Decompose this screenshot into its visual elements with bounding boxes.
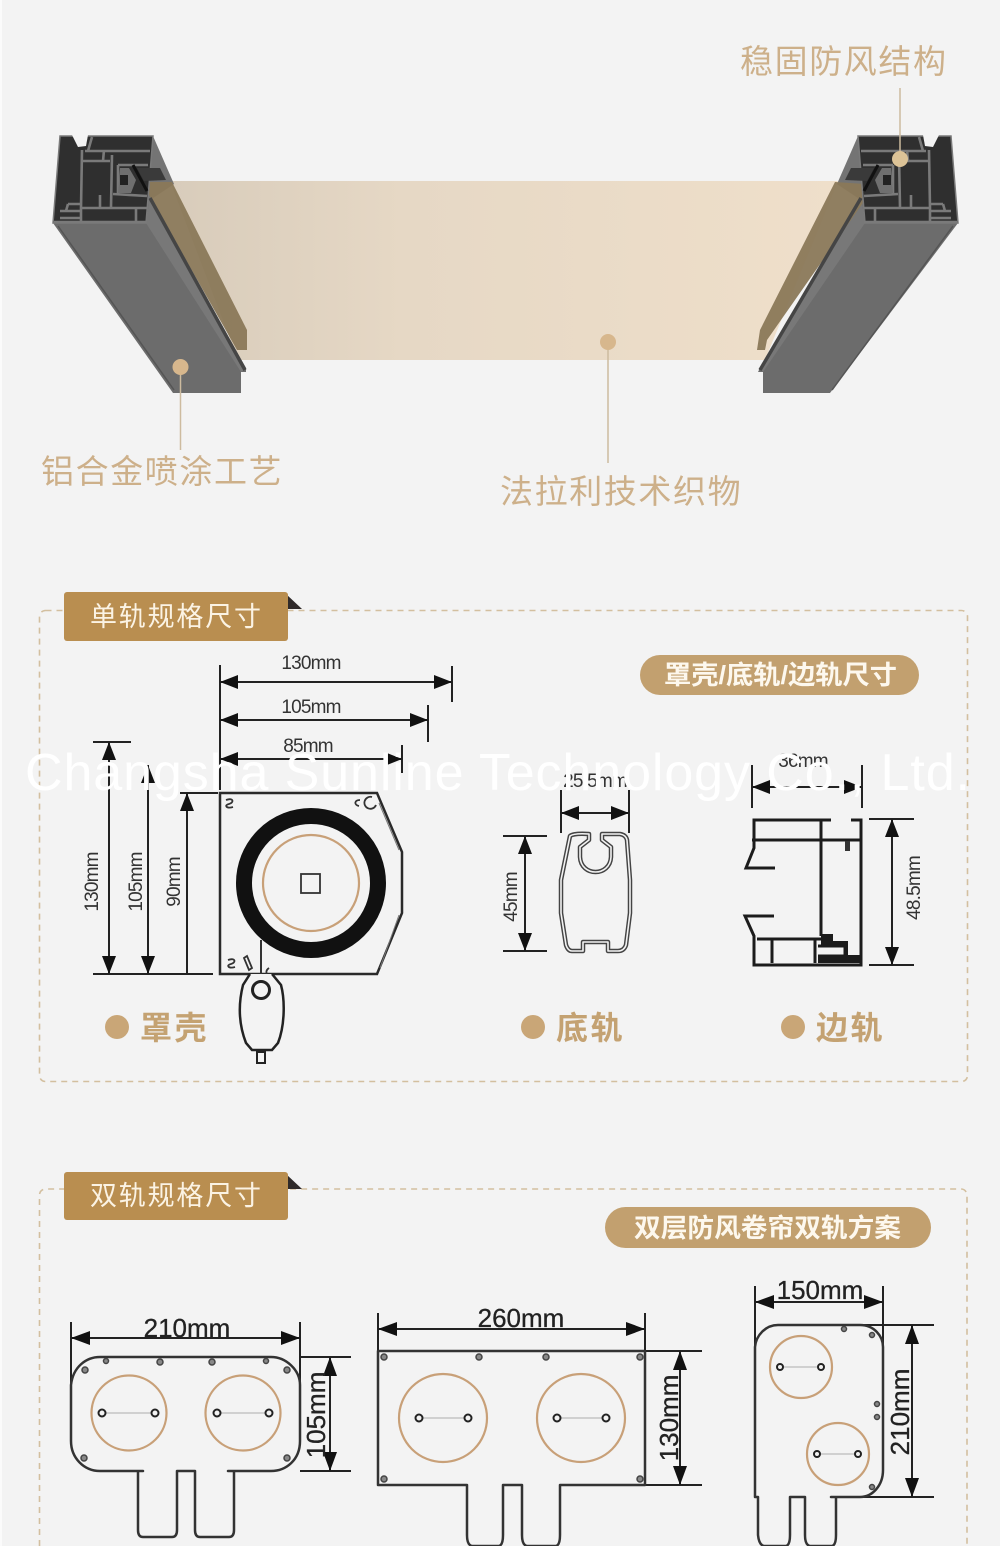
callout: aluminium coating — [41, 359, 283, 490]
diagram: housing: 130mm — [82, 852, 103, 912]
callout: structure: 稳固防风结构 — [740, 43, 948, 80]
callout: fabric: 法拉利技术织物 — [500, 473, 742, 510]
panel: single rail specs — [40, 592, 968, 1082]
panel: double rail specs — [40, 1172, 967, 1546]
diagram: housing: 130mm — [281, 653, 341, 674]
pill: housing and rail dimensions — [640, 655, 919, 695]
label: housing — [105, 1010, 209, 1046]
label: side rail: 边轨 — [816, 1010, 885, 1046]
pill: double layer scheme — [605, 1207, 931, 1248]
heading tag: double rail — [64, 1172, 302, 1220]
watermark: Changsha Sunline Technology Co., Ltd. — [25, 744, 970, 802]
heading tag: double rail: 双轨规格尺寸 — [90, 1181, 263, 1211]
diagram: side rail — [745, 751, 925, 965]
diagram: housing: 105mm — [126, 852, 147, 912]
callout: structure — [740, 43, 948, 167]
diagram: 210 by 105: 105mm — [301, 1372, 331, 1458]
label: bottom rail: 底轨 — [556, 1010, 625, 1046]
label: housing: 罩壳 — [140, 1010, 209, 1046]
diagram: bottom rail: 45mm — [501, 872, 522, 922]
diagram: 260 by 130: 260mm — [478, 1303, 564, 1333]
diagram: 260 by 130 — [378, 1303, 702, 1546]
label: bottom rail — [521, 1010, 625, 1046]
diagram: 260 by 130: 130mm — [654, 1375, 684, 1461]
pill: housing and rail dimensions: 罩壳/底轨/边轨尺寸 — [664, 660, 897, 690]
diagram: bottom rail — [501, 771, 630, 951]
diagram: housing — [82, 653, 452, 1063]
diagram: housing: 85mm — [283, 736, 333, 757]
diagram: housing: 105mm — [281, 697, 341, 718]
right aluminium profile — [757, 135, 958, 393]
diagram: housing: 90mm — [164, 857, 185, 907]
diagram: 210 by 105: 210mm — [144, 1313, 230, 1343]
pill: double layer scheme: 双层防风卷帘双轨方案 — [634, 1213, 901, 1243]
diagram: side rail: 48.5mm — [904, 856, 925, 920]
heading tag: single rail — [64, 592, 302, 641]
heading tag: single rail: 单轨规格尺寸 — [90, 602, 263, 632]
diagram: 150 by 210: 150mm — [777, 1275, 863, 1305]
left aluminium profile — [53, 135, 247, 393]
diagram: 150 by 210: 210mm — [885, 1369, 915, 1455]
diagram: bottom rail: 25.5mm — [563, 771, 627, 792]
diagram: side rail: 36mm — [778, 751, 828, 772]
label: side rail — [781, 1010, 885, 1046]
callout: fabric — [500, 334, 742, 510]
fabric panel — [170, 181, 838, 360]
diagram: 150 by 210 — [755, 1275, 934, 1546]
diagram: 210 by 105 — [71, 1313, 351, 1537]
callout: aluminium coating: 铝合金喷涂工艺 — [41, 453, 283, 490]
